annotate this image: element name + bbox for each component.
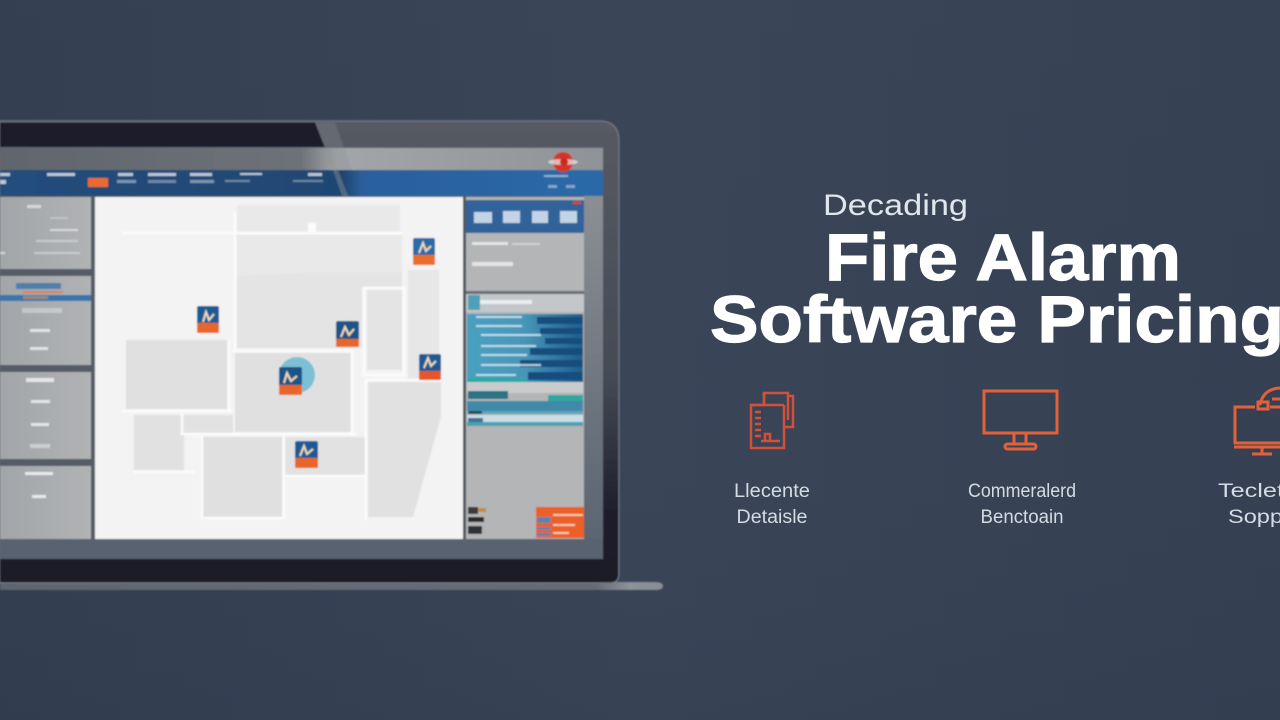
label line 2: Detaisle: [736, 507, 808, 528]
feature: commercial: [968, 391, 1076, 528]
room center: [235, 353, 352, 432]
orange button: [88, 178, 108, 187]
feature: technical support: [1218, 388, 1280, 528]
title line 2: Software Pricing: [710, 282, 1280, 356]
laptop base: [0, 582, 663, 590]
sidebar card 3: [0, 372, 91, 459]
teal data list: [467, 314, 583, 382]
room right tall: [408, 270, 439, 380]
room bottom middle: [285, 437, 365, 475]
blue navigation bar: [0, 170, 603, 196]
room bottom right: [368, 382, 441, 517]
right details panel: [463, 196, 584, 539]
label: Llecente: [734, 481, 810, 502]
progress row: [466, 294, 584, 312]
label: Commeralerd: [968, 481, 1076, 502]
walls: [122, 212, 442, 520]
sidebar card 1: [0, 197, 91, 269]
label line 2: Benctoain: [980, 507, 1064, 528]
room small left: [134, 415, 184, 470]
label: Teclet: [1218, 481, 1280, 502]
map marker 3: [413, 238, 435, 265]
title: [710, 220, 1280, 356]
map marker 6: [295, 441, 318, 468]
room top: [237, 205, 400, 232]
room bottom: [203, 437, 282, 517]
dark legend icons: [468, 507, 486, 534]
feature: licence details: [734, 393, 810, 528]
label line 2: Sopp: [1228, 507, 1280, 528]
orange legend: [536, 507, 584, 538]
bezel dark top: [0, 122, 325, 147]
right edge of screen: [584, 196, 603, 539]
glare: [315, 122, 352, 170]
map marker 1: [197, 306, 219, 333]
bezel dark bottom: [0, 558, 617, 582]
room left: [126, 340, 227, 409]
title line 1: Fire Alarm: [825, 220, 1181, 294]
laptop screen: [0, 122, 603, 559]
floor plan map: [95, 197, 463, 539]
screen top band: [0, 148, 603, 170]
panel labels: [472, 242, 540, 266]
map marker 4: [419, 354, 441, 380]
teal rows lower: [467, 382, 583, 426]
left sidebar: [0, 196, 95, 539]
room strip: [181, 415, 233, 433]
red logo: [548, 152, 578, 172]
icon: headset computer: [1234, 388, 1280, 454]
laptop bezel: [0, 121, 619, 583]
location highlight: [279, 357, 315, 393]
subtitle: Decading: [823, 189, 968, 222]
room right narrow: [367, 290, 402, 370]
laptop mockup: [0, 121, 663, 590]
map marker 2: [336, 321, 359, 347]
sidebar card 2: [0, 276, 91, 365]
sidebar card 4: [0, 466, 91, 539]
map marker 5: [279, 367, 302, 395]
room upper large: [237, 235, 402, 348]
icon: monitor: [984, 391, 1057, 449]
panel header: [466, 200, 584, 233]
icon: document: [751, 393, 793, 448]
